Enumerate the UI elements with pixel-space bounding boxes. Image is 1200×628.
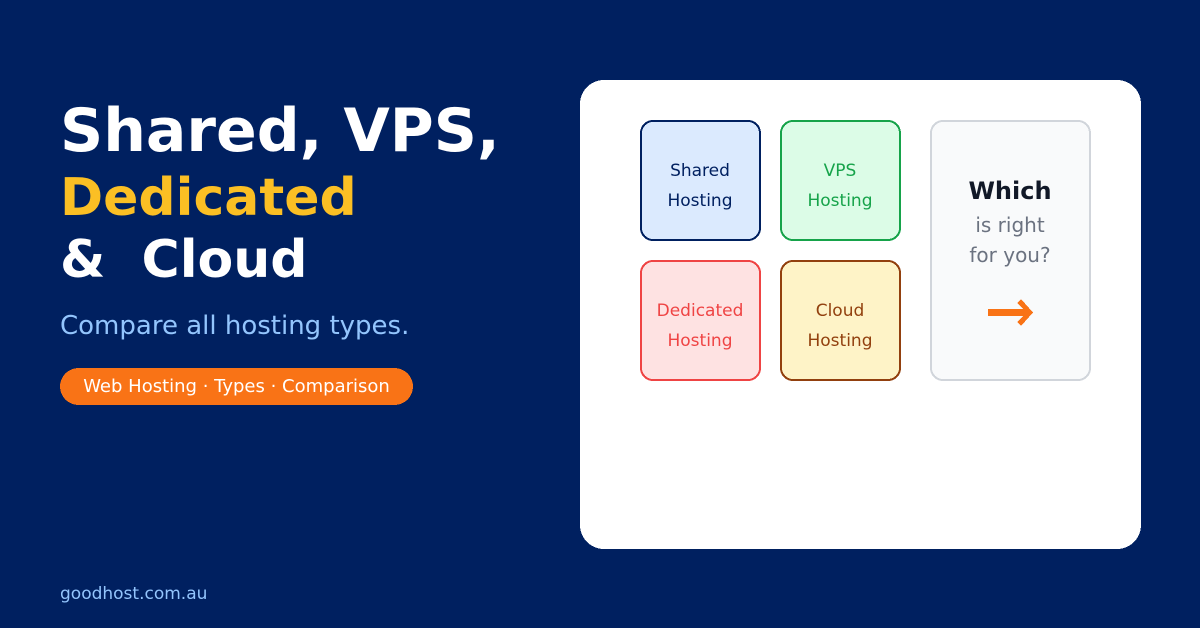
card: vps hosting: VPS (824, 161, 856, 181)
title: Shared, VPS, (60, 96, 500, 166)
card: vps hosting: Hosting (808, 191, 872, 211)
card: which is right for you: is right (975, 213, 1045, 237)
icon: arrow (988, 299, 1033, 326)
card: which is right for you (931, 121, 1090, 380)
title: Dedicated (60, 168, 357, 228)
card: vps hosting (781, 121, 900, 240)
card: cloud hosting (781, 261, 900, 380)
title: & Cloud (60, 230, 308, 290)
card: dedicated hosting: Hosting (668, 331, 732, 351)
panel: hosting types (580, 80, 1141, 549)
card: which is right for you: for you? (969, 243, 1051, 267)
footer url: goodhost.com.au (60, 584, 207, 604)
card: dedicated hosting (641, 261, 760, 380)
card: cloud hosting: Cloud (816, 301, 864, 321)
card: which is right for you: Which (968, 177, 1052, 205)
card: dedicated hosting: Dedicated (657, 301, 743, 321)
card: shared hosting: Shared (670, 161, 730, 181)
card: shared hosting: Hosting (668, 191, 732, 211)
title (60, 96, 500, 290)
tag pill (60, 368, 413, 405)
subtitle: Compare all hosting types. (60, 311, 409, 341)
card: cloud hosting: Hosting (808, 331, 872, 351)
tag pill: Web Hosting · Types · Comparison (83, 376, 390, 397)
card: shared hosting (641, 121, 760, 240)
